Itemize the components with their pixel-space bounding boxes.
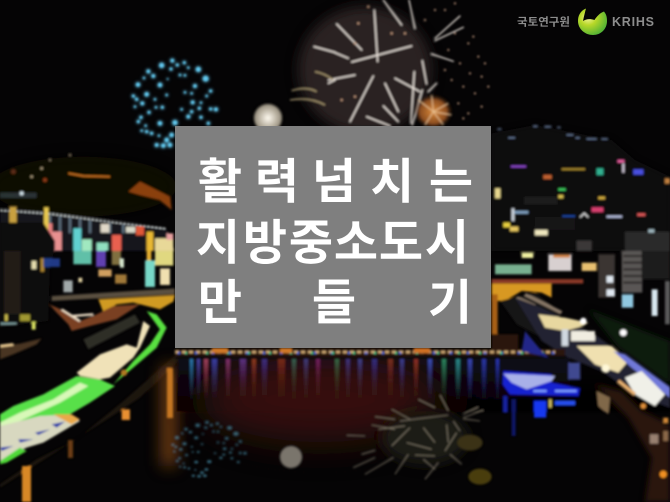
title line 2: 시 [425, 203, 469, 273]
right buildings and bridge [492, 251, 670, 384]
title line 3: 기 [428, 263, 472, 333]
title line 2: 방 [243, 203, 287, 273]
logo text: KRIHS: KRIHS [612, 15, 654, 29]
right bank town [492, 125, 670, 251]
left hillside and town lights [0, 154, 177, 217]
title line 2: 도 [379, 203, 423, 273]
left lantern riverside [0, 207, 175, 251]
right bank festival [515, 298, 670, 502]
reflection: small white burst [280, 446, 302, 468]
firework reflections in water [172, 395, 492, 485]
title line 3: 들 [312, 263, 356, 333]
left buildings and lower lanterns [0, 223, 175, 359]
title line 2: 소 [334, 203, 378, 273]
title line 1: 넘 [312, 142, 356, 212]
reflection: blue burst [172, 421, 247, 478]
logo: KRIHS [517, 8, 654, 35]
reflection: large white burst [347, 395, 492, 485]
lantern row on far bank [175, 348, 565, 359]
logo icon: green leaf [578, 8, 607, 35]
title line 1: 치 [370, 142, 414, 212]
title line 3: 만 [198, 263, 242, 333]
logo text: institute name: 국토연구원 [517, 14, 570, 28]
panel background [175, 126, 491, 348]
river reflections [22, 357, 670, 502]
title line 1: 력 [255, 142, 299, 212]
title line 2: 지 [196, 203, 240, 273]
title panel [175, 126, 491, 348]
firework: large white burst [290, 0, 489, 133]
blue boat [503, 331, 610, 436]
title text [196, 142, 473, 333]
title line 1: 활 [198, 142, 242, 212]
title line 1: 는 [429, 142, 473, 212]
firework: blue burst [132, 59, 218, 148]
firework: small white burst [254, 104, 282, 132]
title line 2: 중 [289, 203, 333, 273]
left tent market [0, 311, 178, 488]
